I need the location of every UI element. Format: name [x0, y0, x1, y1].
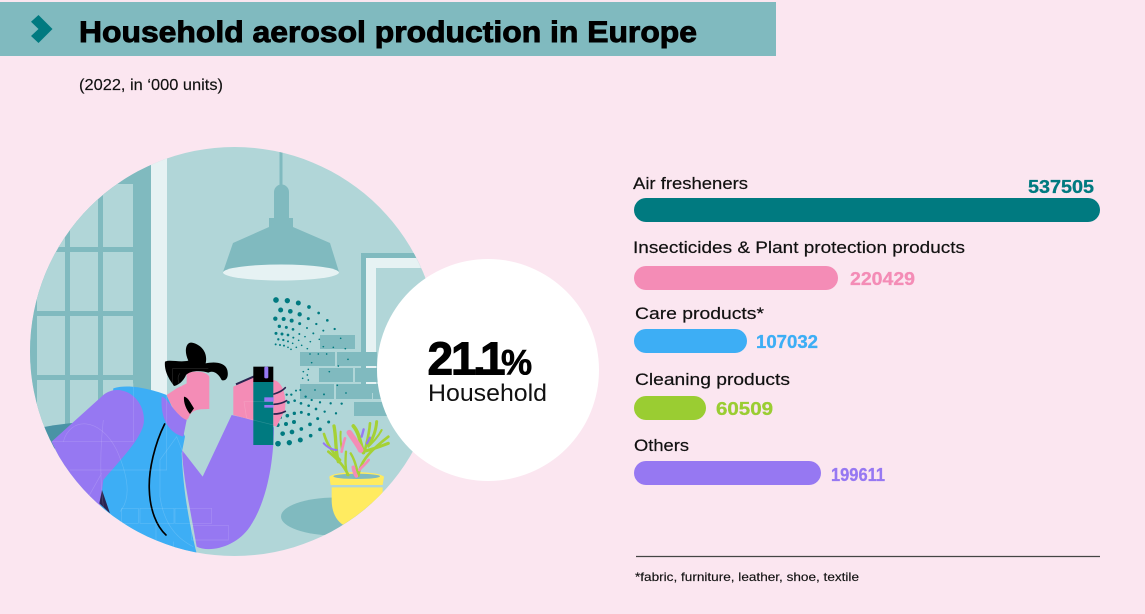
hair — [165, 343, 228, 386]
floor shadows — [44, 421, 389, 536]
ceiling lamp — [223, 147, 339, 280]
sweater torso — [100, 387, 197, 560]
spray mist dots — [273, 297, 349, 446]
bar: others: 199611 — [831, 465, 885, 485]
callout value: 1 — [451, 332, 477, 384]
plant leaves — [324, 422, 388, 476]
bar: insecticides and plant protection products: 220429 — [850, 269, 915, 289]
collar shadow — [184, 397, 194, 414]
bar: cleaning products: 60509 — [716, 399, 773, 419]
fingers — [274, 388, 287, 414]
subtitle: (2022, in ‘000 units) — [79, 77, 223, 94]
callout label: Household — [428, 380, 547, 407]
callout value: % — [501, 344, 532, 382]
collar — [161, 397, 187, 437]
bar: insecticides and plant protection products — [633, 238, 965, 290]
bar: others: Others — [634, 436, 689, 455]
callout value: 1 — [480, 332, 506, 384]
earphone cable — [149, 424, 166, 535]
bar: cleaning products: Cleaning products — [635, 370, 790, 389]
title banner — [0, 2, 776, 56]
callout value: . — [473, 332, 486, 384]
footnote: *fabric, furniture, leather, shoe, textile — [635, 570, 859, 584]
bar: care products: Care products* — [635, 304, 764, 323]
bar: care products — [634, 304, 818, 353]
bar: cleaning products — [634, 370, 790, 420]
sleeve left — [52, 390, 144, 507]
sweater sleeve right — [182, 415, 274, 549]
bar chart — [633, 174, 1100, 485]
bar: air fresheners: Air fresheners — [633, 174, 748, 193]
window — [30, 147, 167, 440]
callout value: 2 — [428, 332, 453, 384]
brick wall — [300, 335, 394, 416]
picture frame — [361, 253, 426, 393]
trouser shadow — [99, 490, 110, 513]
aerosol can — [253, 382, 273, 445]
face and neck — [167, 372, 209, 421]
bar: others — [634, 436, 885, 485]
person — [52, 343, 287, 560]
plant pot and plant — [324, 422, 388, 527]
bar: air fresheners: 537505 — [1028, 177, 1094, 197]
bar: air fresheners — [633, 174, 1100, 222]
hand — [233, 375, 285, 427]
icon: chevron — [31, 15, 52, 43]
pot — [329, 472, 384, 527]
white callout circle — [377, 259, 599, 481]
bar: care products: 107032 — [756, 332, 818, 352]
bar: insecticides and plant protection products: Insecticides & Plant protection products — [633, 238, 965, 257]
sketch lines — [52, 368, 273, 553]
title: Household aerosol production in Europe — [79, 16, 697, 49]
illustration: person spraying aerosol in a room — [30, 147, 451, 560]
